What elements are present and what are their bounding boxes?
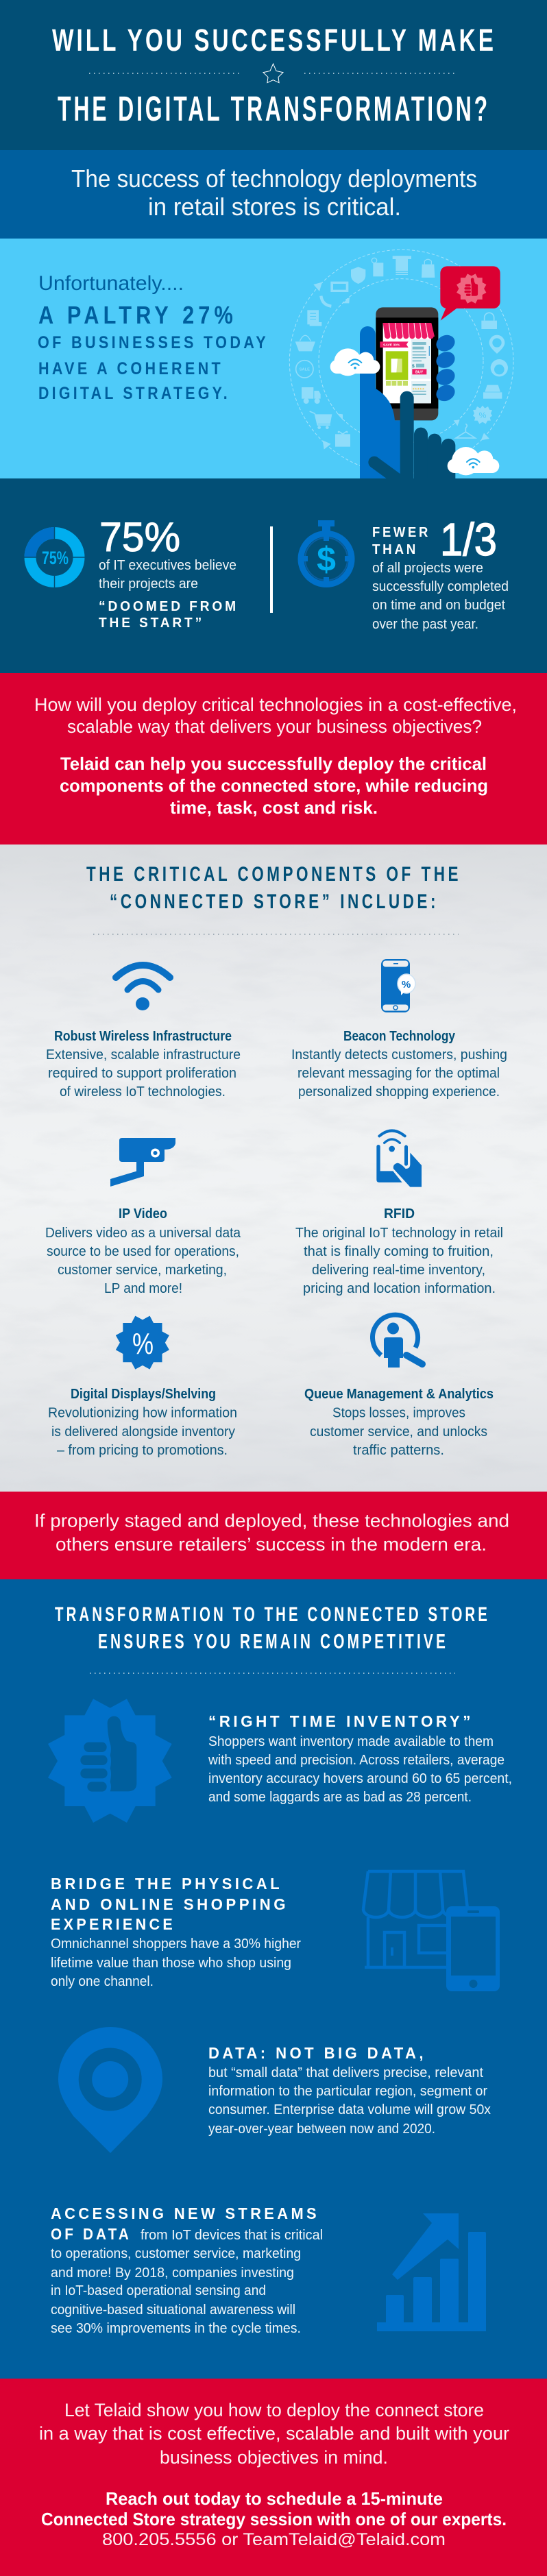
Telaid answer text: components of the connected store, while reducing xyxy=(60,775,488,796)
icon: 75 percent donut xyxy=(24,526,85,588)
icon: 75 percent donut: 75% xyxy=(42,548,69,568)
text: new data streams: from IoT devices that is critical xyxy=(141,2228,323,2243)
statement text: HAVE A COHERENT xyxy=(38,359,223,378)
illustration: hand holding phone with retail icons xyxy=(289,250,513,481)
Telaid answer text: Telaid can help you successfully deploy the critical xyxy=(60,753,487,774)
text: queue management: Stops losses, improves xyxy=(332,1405,465,1420)
stat: fewer than one third: on time and on budget xyxy=(372,598,505,613)
text: small data: consumer. Enterprise data volume will grow 50x xyxy=(208,2102,491,2117)
panel: how will you deploy xyxy=(0,673,547,845)
text: small data: year-over-year between now and 2020. xyxy=(208,2122,435,2137)
component: RFID xyxy=(295,1130,503,1296)
icon: rising bar chart xyxy=(377,2213,486,2331)
icon: star divider xyxy=(89,64,457,83)
pointing hand xyxy=(374,391,455,481)
stat: 75 percent of IT executives: their projects are xyxy=(99,576,198,592)
panel: paltry 27 percent xyxy=(0,239,547,481)
intro text xyxy=(71,165,477,221)
text: bridge physical and online xyxy=(51,1875,301,1989)
stat: 75 percent of IT executives: 75% xyxy=(99,514,180,560)
item: right time inventory xyxy=(48,1699,512,1823)
icon: percent badge: % xyxy=(132,1327,154,1361)
text: bridge physical and online: Omnichannel shoppers have a 30% higher xyxy=(51,1936,301,1952)
holding fingers xyxy=(434,332,457,404)
component: robust wireless xyxy=(46,965,241,1099)
statement text: A PALTRY 27% xyxy=(38,301,237,329)
section heading: “CONNECTED STORE” INCLUDE: xyxy=(110,890,439,913)
call to action text xyxy=(39,2400,509,2468)
text: IP video xyxy=(45,1206,241,1296)
statement text: others ensure retailers’ success in the modern era. xyxy=(56,1534,487,1555)
text: robust wireless xyxy=(46,1028,241,1099)
panel: critical components xyxy=(0,845,547,1492)
text: digital displays xyxy=(48,1386,237,1458)
call to action text: business objectives in mind. xyxy=(160,2447,388,2468)
icon: wifi xyxy=(116,965,170,1010)
stat: fewer than one third: FEWER xyxy=(372,525,430,540)
text: small data: but “small data” that delivers precise, relevant xyxy=(208,2065,483,2080)
icon: stopwatch with dollar xyxy=(301,520,352,584)
intro text: The success of technology deployments xyxy=(71,165,477,193)
left hand xyxy=(360,326,400,478)
text: right time inventory xyxy=(208,1712,512,1805)
component: beacon xyxy=(291,959,507,1099)
text: beacon: Instantly detects customers, pushing xyxy=(291,1047,507,1062)
text: new data streams: see 30% improvements in the cycle times. xyxy=(51,2321,301,2336)
schedule text: Connected Store strategy session with one of our experts. xyxy=(41,2509,507,2529)
divider xyxy=(270,526,273,613)
text: robust wireless: required to support proliferation xyxy=(48,1066,236,1081)
stat: fewer than one third: 1/3 xyxy=(440,514,497,566)
stat: fewer than one third xyxy=(372,514,509,632)
text: queue management: customer service, and unlocks xyxy=(310,1424,487,1439)
text: small data xyxy=(208,2044,491,2137)
statement text xyxy=(38,272,269,403)
text: queue management: Queue Management & Analytics xyxy=(304,1386,494,1402)
text: right time inventory: with speed and precision. Across retailers, average xyxy=(208,1753,505,1768)
item: new data streams xyxy=(51,2204,486,2336)
statement text: Unfortunately.... xyxy=(38,272,184,295)
icon: stopwatch with dollar: $ xyxy=(317,540,336,579)
stat: 75 percent of IT executives: THE START” xyxy=(99,616,204,631)
text: digital displays: is delivered alongside inventory xyxy=(51,1424,235,1439)
statement text: DIGITAL STRATEGY. xyxy=(38,384,230,403)
text: beacon: Beacon Technology xyxy=(343,1028,455,1044)
text: robust wireless: of wireless IoT technologies. xyxy=(60,1084,226,1099)
panel: title header xyxy=(0,0,547,150)
stat: 75 percent of IT executives: of IT executives believe xyxy=(99,558,236,573)
text: bridge physical and online: lifetime value than those who shop using xyxy=(51,1956,291,1971)
call to action text: Let Telaid show you how to deploy the connect store xyxy=(64,2400,484,2420)
text: new data streams xyxy=(51,2204,323,2336)
text: IP video: source to be used for operations, xyxy=(47,1244,239,1259)
section heading xyxy=(55,1603,490,1653)
save tag: SAVE 30% xyxy=(383,343,400,346)
text: bridge physical and online: BRIDGE THE PHYSICAL xyxy=(51,1875,282,1893)
cloud with wifi, right xyxy=(448,447,499,475)
icon: phone with percent bubble: % xyxy=(402,979,411,991)
item: small data xyxy=(58,2027,491,2153)
icon: percent badge xyxy=(116,1316,169,1370)
stat: fewer than one third: successfully completed xyxy=(372,579,509,594)
text: bridge physical and online: EXPERIENCE xyxy=(51,1915,175,1933)
question text: scalable way that delivers your business objectives? xyxy=(67,716,482,737)
text: RFID: RFID xyxy=(384,1206,415,1222)
text: RFID: that is finally coming to fruition, xyxy=(304,1244,494,1259)
icon: location pin xyxy=(58,2027,162,2153)
ghost retail icons xyxy=(295,256,508,450)
text: new data streams: cognitive-based situational awareness will xyxy=(51,2302,295,2318)
text: beacon xyxy=(291,1028,507,1099)
panel: properly staged statement xyxy=(0,1492,547,1579)
text: new data streams: and more! By 2018, companies investing xyxy=(51,2265,294,2281)
ghost icon cut-outs xyxy=(310,284,505,374)
icon: RFID hand xyxy=(376,1130,422,1187)
text: RFID xyxy=(295,1206,503,1296)
text: digital displays: Revolutionizing how information xyxy=(48,1405,237,1420)
panel: executive statistics xyxy=(0,478,547,673)
icon: thumbs up badge xyxy=(48,1699,172,1823)
text: RFID: pricing and location information. xyxy=(303,1281,496,1296)
question text xyxy=(34,694,517,737)
text: robust wireless: Robust Wireless Infrastructure xyxy=(54,1028,232,1044)
icon: person in magnifier xyxy=(373,1315,422,1368)
text: new data streams: in IoT-based operational sensing and xyxy=(51,2283,266,2298)
text: digital displays: – from pricing to promotions. xyxy=(57,1443,228,1458)
cloud with wifi, left xyxy=(330,348,380,376)
text: right time inventory: inventory accuracy hovers around 60 to 65 percent, xyxy=(208,1771,512,1786)
text: RFID: delivering real-time inventory, xyxy=(312,1263,485,1278)
section heading xyxy=(86,863,461,913)
text: IP video: customer service, marketing, xyxy=(58,1263,227,1278)
text: robust wireless: Extensive, scalable infrastructure xyxy=(46,1047,241,1062)
stat: fewer than one third: of all projects were xyxy=(372,561,483,576)
item: bridge physical and online xyxy=(51,1871,500,1991)
contact details: 800.205.5556 or TeamTelaid@Telaid.com xyxy=(102,2530,446,2549)
Telaid answer text xyxy=(60,753,488,818)
panel: intro statement xyxy=(0,150,547,239)
text: queue management: traffic patterns. xyxy=(353,1443,444,1458)
stat: fewer than one third: over the past year. xyxy=(372,617,478,632)
component: digital displays xyxy=(48,1316,237,1458)
text: queue management xyxy=(304,1386,494,1458)
save tag xyxy=(380,341,409,348)
phone body xyxy=(376,307,438,420)
text: new data streams: to operations, customer service, marketing xyxy=(51,2246,301,2261)
text: beacon: personalized shopping experience. xyxy=(298,1084,500,1099)
text: beacon: relevant messaging for the optimal xyxy=(297,1066,500,1081)
statement text: OF BUSINESSES TODAY xyxy=(38,333,269,352)
text: bridge physical and online: AND ONLINE SHOPPING xyxy=(51,1895,289,1913)
price symbol: $ xyxy=(412,364,415,369)
icon: storefront and phone xyxy=(363,1871,500,1991)
text: new data streams: OF DATA xyxy=(51,2225,132,2243)
panel: call to action xyxy=(0,2379,547,2576)
icon: security camera xyxy=(110,1138,175,1187)
dashed rings xyxy=(289,250,513,474)
stat: 75 percent of IT executives xyxy=(99,514,239,631)
component: IP video xyxy=(45,1138,241,1296)
text: digital displays: Digital Displays/Shelving xyxy=(71,1386,216,1402)
statement text xyxy=(34,1511,509,1555)
awning xyxy=(383,323,435,339)
text: bridge physical and online: only one channel. xyxy=(51,1974,154,1989)
buy button: BUY xyxy=(415,370,424,374)
text: right time inventory: Shoppers want inventory made available to them xyxy=(208,1734,494,1749)
text: RFID: The original IoT technology in retail xyxy=(295,1226,503,1241)
text: small data: information to the particular region, segment or xyxy=(208,2084,487,2099)
icon: phone with percent bubble xyxy=(381,959,415,1012)
speech bubble with thumbs up xyxy=(440,266,500,321)
schedule text xyxy=(41,2488,507,2529)
text: IP video: Delivers video as a universal data xyxy=(45,1226,241,1241)
text: right time inventory: and some laggards are as bad as 28 percent. xyxy=(208,1790,472,1805)
text: new data streams: ACCESSING NEW STREAMS xyxy=(51,2204,319,2222)
schedule text: Reach out today to schedule a 15-minute xyxy=(106,2488,443,2509)
rating stars: ★★★★★ xyxy=(412,387,425,390)
ghost percent: % xyxy=(479,411,487,420)
intro text: in retail stores is critical. xyxy=(148,193,401,221)
panel: transformation benefits xyxy=(0,1579,547,2379)
question text: How will you deploy critical technologies in a cost-effective, xyxy=(34,694,517,715)
ghost sale label: SALE xyxy=(300,367,310,372)
phone right panels xyxy=(411,339,431,379)
statement text: If properly staged and deployed, these technologies and xyxy=(34,1511,509,1531)
product tile xyxy=(386,351,408,386)
stat: fewer than one third: THAN xyxy=(372,542,418,557)
buy button xyxy=(412,369,426,374)
stat: 75 percent of IT executives: “DOOMED FROM xyxy=(99,599,239,614)
text: right time inventory: “RIGHT TIME INVENTORY” xyxy=(208,1712,474,1730)
text: small data: DATA: NOT BIG DATA, xyxy=(208,2044,426,2062)
text: IP video: LP and more! xyxy=(104,1281,182,1296)
Telaid answer text: time, task, cost and risk. xyxy=(170,797,378,818)
text: IP video: IP Video xyxy=(119,1206,167,1222)
component: queue management xyxy=(304,1315,494,1458)
call to action text: in a way that is cost effective, scalable and built with your xyxy=(39,2423,509,2444)
